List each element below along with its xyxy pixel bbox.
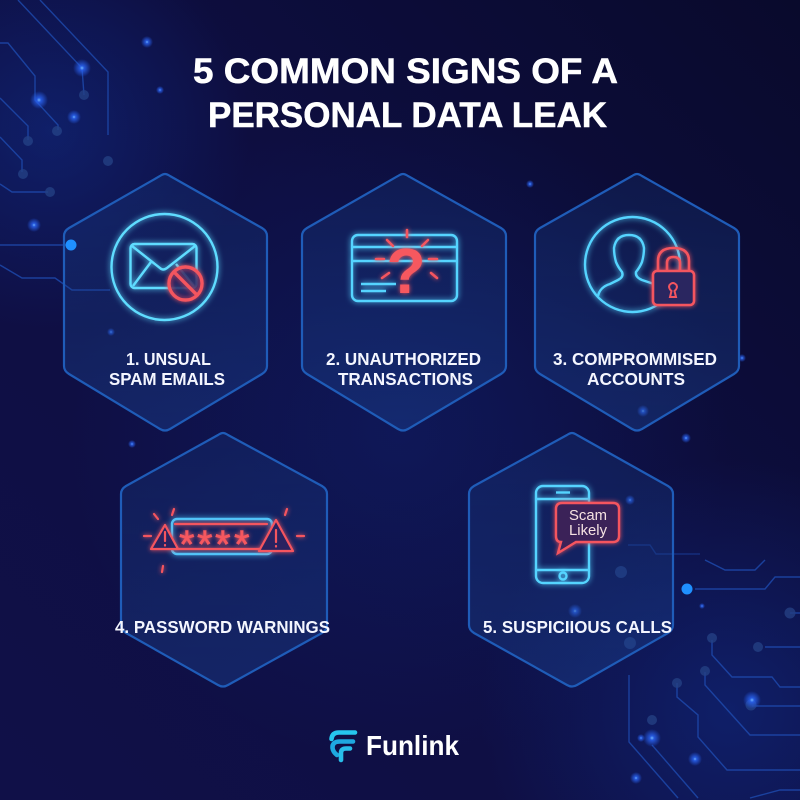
title (193, 52, 618, 135)
panel: unauthorized transactions (302, 174, 506, 430)
circuit traces: bottom right (615, 560, 800, 798)
label: unusual spam emails (109, 349, 225, 389)
panel: password warnings (115, 433, 330, 686)
icon: credit card with question mark (352, 230, 457, 307)
label: unusual spam emails: 1. UNSUAL (126, 349, 211, 369)
title: PERSONAL DATA LEAK (208, 96, 607, 135)
icon: phone with scam likely bubble: Likely (569, 523, 608, 539)
label: unusual spam emails: SPAM EMAILS (109, 369, 225, 389)
panel: suspicious calls (469, 433, 673, 686)
icon: phone with scam likely bubble: Scam (569, 508, 607, 524)
circuit traces: top left (0, 0, 700, 554)
icon: user with padlock (585, 217, 694, 312)
icon: phone with scam likely bubble (536, 486, 619, 583)
label: unauthorized transactions: 2. UNAUTHORIZED (326, 349, 481, 369)
label: suspicious calls: 5. SUSPICIIOUS CALLS (483, 617, 672, 637)
icon: password field with warning triangles: **** (179, 523, 250, 567)
label: compromised accounts: ACCOUNTS (587, 369, 685, 389)
label: unauthorized transactions (326, 349, 481, 389)
label: password warnings: 4. PASSWORD WARNINGS (115, 617, 330, 637)
logo: Funlink: Funlink (366, 730, 459, 761)
logo: Funlink (332, 730, 459, 761)
icon: logo mark (332, 732, 355, 760)
node: left circuit node (66, 240, 76, 250)
title: 5 COMMON SIGNS OF A (193, 52, 618, 91)
panel: unusual spam emails (64, 174, 267, 430)
label: unauthorized transactions: TRANSACTIONS (338, 369, 473, 389)
panel: compromised accounts (535, 174, 739, 430)
icon: password field with warning triangles (144, 509, 304, 572)
node: right circuit node (682, 584, 692, 594)
label: compromised accounts: 3. COMPROMMISED (553, 349, 717, 369)
label: compromised accounts (553, 349, 717, 389)
icon: credit card with question mark: ? (386, 235, 426, 307)
icon: envelope with prohibited sign (112, 214, 218, 320)
